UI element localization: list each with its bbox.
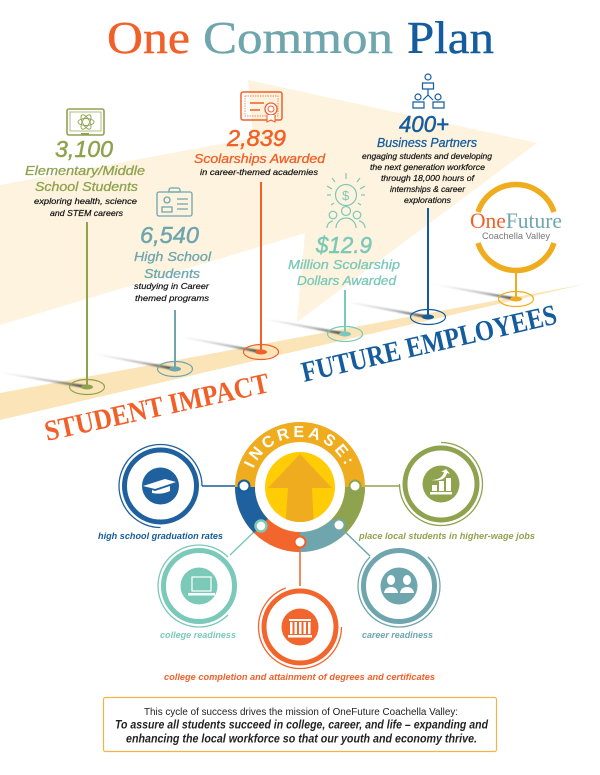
node: high school graduation [98, 444, 223, 541]
node: college completion [164, 586, 435, 682]
heading: student impact: STUDENT IMPACT [42, 367, 272, 448]
pin: OneFuture logo: OneFuture [470, 208, 562, 233]
icon: id badge [157, 188, 192, 216]
icon: atom monitor [67, 109, 104, 135]
node: higher-wage jobs [358, 442, 535, 541]
pin: scholarships awarded [180, 182, 278, 360]
stat: business partners [362, 111, 492, 205]
stat: elementary/middle school students: School Students [35, 179, 139, 194]
pin: scholarship dollars [262, 290, 362, 342]
icon: graduation cap [143, 479, 176, 494]
stat: business partners: 400+ [399, 111, 449, 137]
icon: up arrow [265, 452, 335, 522]
stat: business partners: explorations [404, 195, 452, 205]
stat: high school students: studying in Career [134, 281, 210, 291]
pin: business partners [345, 208, 446, 324]
label: college completion and attainment of degrees and certificates [164, 672, 435, 682]
pin: OneFuture logo: Coachella Valley [482, 231, 551, 241]
node: college readiness [141, 528, 257, 644]
stat: business partners: the next generation workforce [370, 162, 485, 172]
stat: business partners: engaging students and developing [362, 151, 492, 161]
node: career readiness [341, 528, 457, 644]
label: college readiness [160, 630, 236, 640]
stat: high school students: Students [144, 266, 201, 281]
icon: dollar and people: $ [342, 188, 350, 203]
increase hub [235, 422, 365, 552]
icon: institution building [288, 619, 312, 638]
mission callout [104, 698, 496, 752]
icon: org chart [413, 74, 444, 108]
pin: elementary/middle school [0, 222, 104, 394]
stat: elementary/middle school students [25, 136, 145, 218]
stat: high school students: themed programs [135, 293, 210, 303]
icon: dollar and people [327, 173, 365, 228]
label: high school graduation rates [98, 531, 223, 541]
icon: certificate [241, 92, 282, 122]
stat: scholarships awarded: Scolarships Awarded [194, 151, 326, 166]
connector lines [202, 486, 399, 586]
stat: elementary/middle school students: Elementary/Middle [25, 163, 145, 178]
title: One [107, 12, 190, 63]
icon: two people [384, 575, 414, 593]
stat: high school students: High School [134, 249, 212, 264]
background arrow [0, 80, 537, 325]
label: place local students in higher-wage jobs [358, 531, 535, 541]
stat: scholarships awarded [194, 125, 326, 177]
heading: future employees: FUTURE EMPLOYEES [298, 299, 560, 389]
title: Plan [407, 12, 494, 63]
hub label: INCREASE: [244, 426, 352, 468]
title: Common [203, 12, 393, 63]
mission callout: This cycle of success drives the mission of OneFuture Coachella Valley: [144, 707, 458, 718]
stat: high school students: 6,540 [140, 222, 199, 248]
timeline road [0, 284, 585, 420]
pin: high school [92, 310, 192, 376]
stat: high school students [134, 222, 212, 303]
stat: scholarship dollars: Dollars Awarded [297, 273, 397, 288]
pin: OneFuture logo [435, 184, 562, 306]
stat: elementary/middle school students: 3,100 [55, 136, 113, 162]
stat: scholarships awarded: 2,839 [226, 125, 286, 151]
stat: business partners: through 18,000 hours of [381, 173, 476, 183]
stat: scholarship dollars: Million Scolarship [288, 257, 400, 272]
stat: business partners: Business Partners [377, 135, 477, 150]
mission callout: To assure all students succeed in college, career, and life – expanding and [115, 720, 489, 732]
title [107, 12, 494, 63]
stat: scholarships awarded: in career-themed academies [200, 167, 319, 177]
stat: elementary/middle school students: and STEM careers [50, 208, 124, 218]
stat: business partners: internships & career [390, 184, 466, 194]
icon: laptop [188, 577, 215, 596]
mission callout: enhancing the local workforce so that our youth and economy thrive. [126, 734, 477, 746]
icon: bar chart [430, 469, 452, 494]
label: career readiness [362, 630, 433, 640]
stat: scholarship dollars [288, 232, 400, 288]
stat: elementary/middle school students: exploring health, science [34, 196, 137, 206]
stat: scholarship dollars: $12.9 [315, 232, 372, 258]
